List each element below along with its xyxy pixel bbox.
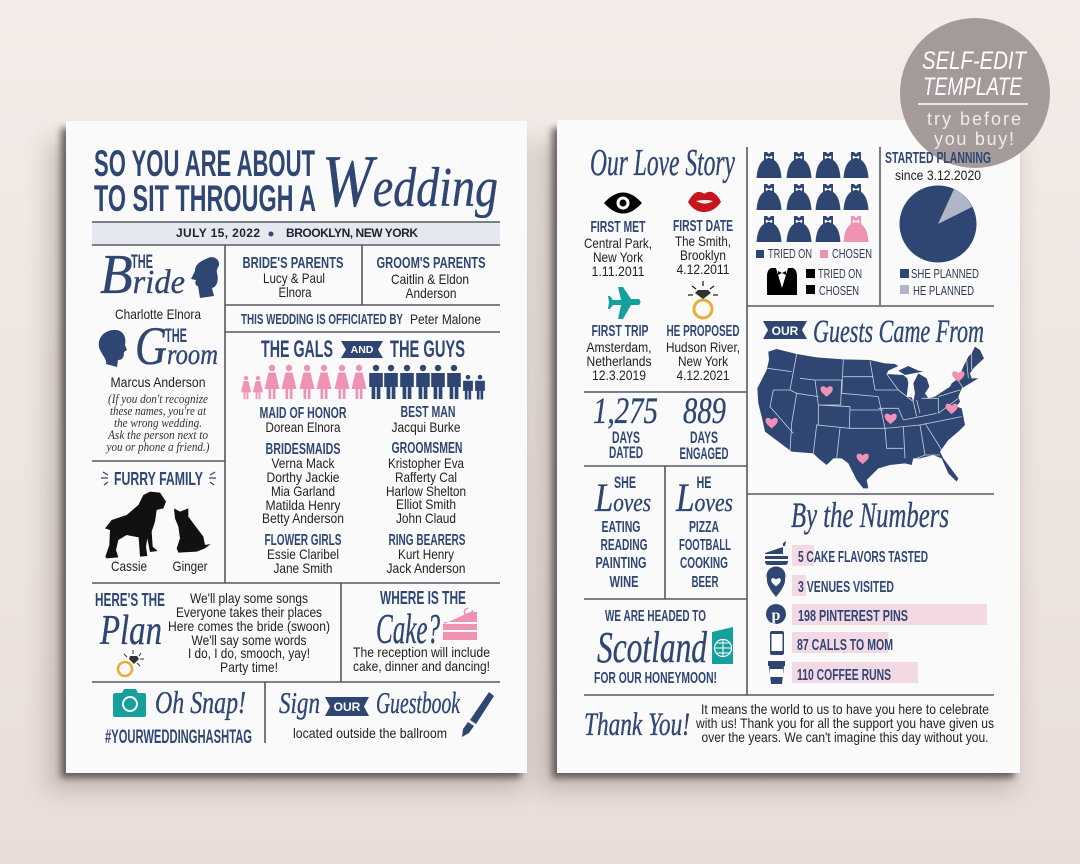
list: bride's side: Verna Mack (272, 455, 335, 471)
icon: groom silhouette (99, 330, 127, 367)
right card content (584, 142, 994, 745)
plan text: We'll say some words (192, 632, 306, 648)
note: wrong wedding: you or phone a friend.) (105, 440, 210, 454)
list: groom's side (386, 404, 466, 576)
he loves: PIZZA (689, 519, 719, 536)
heading: the gals and the guys: AND (351, 344, 374, 356)
dresses chart: TRIED ON (768, 247, 812, 261)
officiant: THIS WEDDING IS OFFICIATED BY (241, 311, 403, 328)
honeymoon (594, 608, 733, 687)
icon: pinterest (766, 604, 786, 624)
list: bride's side: MAID OF HONOR (260, 405, 347, 422)
she loves: EATING (602, 519, 640, 536)
heading: the gals and the guys (261, 336, 465, 363)
started planning: since 3.12.2020 (895, 167, 981, 183)
parents: bride: BRIDE'S PARENTS (242, 255, 344, 272)
honeymoon: WE ARE HEADED TO (605, 608, 706, 625)
list: groom's side: Kristopher Eva (388, 455, 464, 471)
badge heading (922, 47, 1027, 101)
sign our guestbook: Guestbook (376, 685, 461, 720)
heading: the gals and the guys: THE GUYS (390, 336, 465, 363)
parents: groom: Anderson (406, 285, 456, 301)
oh snap (105, 684, 252, 748)
she loves: SHE (614, 473, 636, 492)
badge heading: TEMPLATE (923, 73, 1022, 101)
he proposed (666, 281, 740, 383)
title: TO SIT THROUGH A (94, 178, 316, 219)
left card content (92, 141, 500, 748)
stat: days engaged: DAYS (690, 428, 718, 447)
groom block (99, 316, 218, 390)
bar chart: by the numbers: 5 CAKE FLAVORS TASTED (798, 549, 928, 566)
icon: coffee cup (768, 661, 785, 684)
dresses chart: CHOSEN (832, 247, 872, 261)
tuxedo chart (767, 267, 862, 298)
parents: bride (242, 255, 344, 300)
where is the cake (353, 588, 490, 674)
first trip (586, 287, 652, 383)
list: bride's side: Betty Anderson (262, 510, 344, 526)
icon: eye (604, 192, 642, 214)
first met: Central Park, (584, 235, 652, 251)
first met (584, 192, 652, 279)
note: wrong wedding: the wrong wedding. (114, 416, 202, 430)
first met: 1.11.2011 (592, 263, 645, 279)
bar chart: by the numbers (765, 541, 987, 684)
plan text: Party time! (220, 659, 278, 675)
date band (92, 222, 500, 245)
icon: bride silhouette (191, 257, 219, 298)
he proposed: Hudson River, (666, 339, 740, 355)
furry family: Cassie (111, 558, 147, 574)
tuxedo chart: CHOSEN (819, 284, 859, 298)
groom block: Marcus Anderson (110, 374, 206, 390)
thank you: with us! Thank you for all the support you have given us (695, 715, 994, 731)
honeymoon: Scotland (597, 623, 708, 672)
guests came from heading: Guests Came From (813, 314, 984, 350)
first date: FIRST DATE (673, 218, 733, 235)
list: groom's side: John Claud (396, 510, 456, 526)
icon: ring (118, 650, 144, 676)
badge subtext (927, 109, 1021, 149)
he proposed: HE PROPOSED (666, 323, 740, 340)
date band: JULY 15, 2022 (176, 226, 260, 240)
icon: venue pin (766, 566, 785, 597)
here's the plan (95, 590, 330, 676)
first trip: Amsterdam, (586, 339, 652, 355)
where is the cake: cake, dinner and dancing! (353, 658, 490, 674)
list: groom's side: GROOMSMEN (392, 440, 462, 457)
list: groom's side: Kurt Henry (398, 546, 454, 562)
title (94, 141, 498, 223)
groom block: Groom (135, 316, 218, 376)
list: bride's side: FLOWER GIRLS (264, 532, 342, 549)
started planning: SHE PLANNED (911, 267, 979, 281)
list: bride's side: Essie Claribel (267, 546, 339, 562)
sign our guestbook (279, 685, 494, 741)
guests came from heading: OUR (772, 324, 799, 338)
thank you (584, 701, 994, 745)
he proposed: New York (678, 353, 729, 369)
list: bride's side: Dorthy Jackie (266, 469, 340, 485)
oh snap: #YOURWEDDINGHASHTAG (105, 727, 252, 748)
list: groom's side: RING BEARERS (388, 532, 466, 549)
she loves: PAINTING (596, 555, 646, 572)
our love story heading: Our Love Story (590, 142, 735, 184)
sign our guestbook: OUR (334, 700, 361, 714)
bride block: THE (131, 252, 153, 273)
list: bride's side: Mia Garland (271, 483, 335, 499)
he loves: COOKING (680, 555, 728, 572)
first date: 4.12.2011 (676, 261, 730, 277)
honeymoon: FOR OUR HONEYMOON! (594, 670, 717, 687)
icon: plane (608, 287, 640, 319)
sign our guestbook: located outside the ballroom (293, 725, 447, 741)
where is the cake: WHERE IS THE (380, 588, 466, 608)
note: wrong wedding: Ask the person next to (107, 428, 208, 442)
she loves (594, 473, 651, 591)
list: bride's side (260, 405, 347, 576)
officiant: Peter Malone (410, 311, 481, 327)
badge: self-edit template (900, 18, 1050, 168)
stat: days dated: DAYS (612, 428, 640, 447)
where is the cake: Cake? (376, 607, 440, 653)
bride block (100, 244, 219, 322)
he loves: FOOTBALL (679, 537, 731, 554)
list: groom's side: Jack Anderson (386, 560, 466, 576)
list: bride's side: Matilda Henry (266, 497, 340, 513)
he loves: BEER (692, 574, 719, 591)
first date (673, 192, 733, 277)
panel: left card (66, 121, 527, 773)
panel: right card (557, 120, 1020, 773)
she loves: WINE (610, 574, 639, 591)
furry family: Ginger (172, 558, 208, 574)
card shadows (48, 128, 1016, 790)
list: groom's side: Rafferty Cal (395, 469, 457, 485)
here's the plan: Plan (99, 608, 162, 654)
pictogram: wedding party (241, 365, 485, 399)
parents: groom: Caitlin & Eldon (391, 271, 469, 287)
thank you: It means the world to us to have you here to celebrate (701, 701, 989, 717)
sign our guestbook: Sign (279, 685, 320, 720)
badge heading: SELF-EDIT (922, 47, 1027, 75)
thank you: over the years. We can't imagine this day without you. (702, 729, 988, 745)
he loves: Loves (675, 475, 733, 520)
parents: groom (376, 255, 486, 301)
note: wrong wedding: (If you don't recognize (108, 392, 208, 406)
by the numbers heading: By the Numbers (791, 495, 949, 535)
first met: FIRST MET (590, 219, 646, 236)
she loves: READING (600, 537, 648, 554)
title: SO YOU ARE ABOUT (94, 143, 315, 184)
plan text (168, 590, 330, 675)
stat: days engaged: 889 (683, 391, 726, 432)
first trip: Netherlands (586, 353, 652, 369)
parents: bride: Elnora (278, 284, 312, 300)
started planning (885, 150, 991, 298)
pie chart (900, 186, 976, 262)
date band: BROOKLYN, NEW YORK (286, 226, 418, 240)
stat: days engaged: ENGAGED (680, 444, 728, 463)
he loves (675, 473, 733, 591)
badge subtext: you buy! (934, 129, 1014, 149)
icon: dog (105, 492, 166, 558)
icon: cat (174, 508, 211, 553)
icon: ring (688, 281, 718, 318)
bar chart: by the numbers: 110 COFFEE RUNS (797, 667, 891, 684)
started planning: HE PLANNED (913, 284, 974, 298)
first met: New York (593, 249, 644, 265)
list: bride's side: Dorean Elnora (266, 419, 341, 435)
first date: Brooklyn (680, 247, 726, 263)
oh snap: Oh Snap! (155, 684, 246, 720)
stat: days dated (593, 391, 658, 462)
note: wrong wedding: these names, you're at (110, 404, 206, 418)
first trip: FIRST TRIP (592, 323, 649, 340)
where is the cake: The reception will include (353, 644, 490, 660)
furry family (101, 469, 216, 574)
bride block: Bride (100, 244, 185, 306)
first date: The Smith, (675, 233, 731, 249)
list: groom's side: Harlow Shelton (386, 483, 466, 499)
parents: groom: GROOM'S PARENTS (376, 255, 486, 272)
list: groom's side: Elliot Smith (396, 496, 456, 512)
bar chart: by the numbers: 198 PINTEREST PINS (798, 608, 908, 625)
bar chart: by the numbers: 3 VENUES VISITED (798, 579, 894, 596)
heading: the gals and the guys: THE GALS (261, 336, 333, 363)
furry family: FURRY FAMILY (114, 469, 203, 489)
icon: cake (765, 541, 788, 565)
list: groom's side: Jacqui Burke (392, 419, 461, 435)
badge subtext: try before (927, 109, 1021, 129)
here's the plan: HERE'S THE (95, 590, 165, 610)
he loves: HE (696, 473, 712, 492)
stat: days dated: DATED (609, 443, 643, 462)
groom block: THE (165, 326, 187, 347)
plan text: Everyone takes their places (176, 604, 322, 620)
icon: pen (462, 692, 494, 737)
plan text: We'll play some songs (190, 590, 308, 606)
icon: passport (712, 627, 733, 664)
bar chart: by the numbers: 87 CALLS TO MOM (797, 637, 893, 654)
plan text: I do, I do, smooch, yay! (188, 645, 310, 661)
stat: days dated: 1,275 (593, 391, 658, 432)
tuxedo chart: TRIED ON (818, 267, 862, 281)
us map (757, 347, 984, 488)
title: Wedding (322, 141, 498, 223)
stat: days engaged (680, 391, 728, 463)
thank you: Thank You! (584, 707, 690, 743)
first trip: 12.3.2019 (592, 367, 646, 383)
plan text: Here comes the bride (swoon) (168, 618, 330, 634)
dresses chart (756, 152, 872, 261)
bride block: Charlotte Elnora (115, 306, 201, 322)
list: groom's side: BEST MAN (400, 404, 456, 421)
icon: camera (113, 689, 146, 717)
guests came from heading (763, 314, 984, 350)
she loves: Loves (594, 475, 651, 520)
note: wrong wedding (105, 392, 210, 454)
icon: phone (770, 631, 784, 655)
parents: bride: Lucy & Paul (263, 270, 325, 286)
icon: pinterest: p (772, 607, 781, 624)
icon: cake (443, 608, 477, 640)
list: bride's side: Jane Smith (274, 560, 332, 576)
started planning: STARTED PLANNING (885, 150, 991, 167)
he proposed: 4.12.2021 (676, 367, 730, 383)
icon: lips (688, 192, 721, 212)
list: bride's side: BRIDESMAIDS (266, 441, 341, 458)
